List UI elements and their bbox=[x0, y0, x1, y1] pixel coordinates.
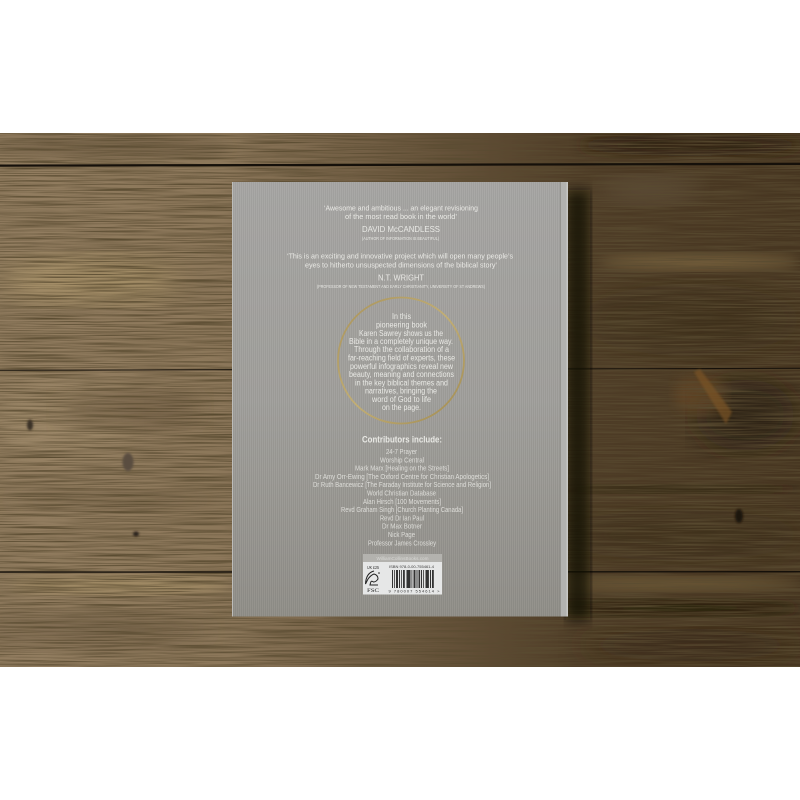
contributors list: Mark Marx [Healing on the Streets] bbox=[355, 466, 449, 473]
barcode bars bbox=[392, 570, 434, 588]
wood tonal patches bbox=[0, 134, 800, 661]
circle blurb text bbox=[348, 312, 455, 412]
quote block: N.T. Wright: eyes to hitherto unsuspected dimensions of the biblical story’ bbox=[305, 260, 497, 270]
gold circle bbox=[338, 298, 464, 424]
circle blurb text: far-reaching field of experts, these bbox=[348, 354, 455, 362]
circle blurb text: pioneering book bbox=[376, 320, 428, 330]
price: UK £25 bbox=[367, 565, 380, 570]
quote block: N.T. Wright: (PROFESSOR OF NEW TESTAMENT AND EARLY CHRISTIANITY, UNIVERSITY OF ST ANDREWS) bbox=[317, 284, 486, 289]
quote block: N.T. Wright bbox=[287, 252, 513, 289]
contributors list: Dr Amy Orr-Ewing [The Oxford Centre for Christian Apologetics] bbox=[315, 474, 489, 481]
circle blurb text: in the key biblical themes and bbox=[355, 378, 448, 387]
website band: WilliamCollinsBooks.com bbox=[376, 556, 429, 561]
book spine hinge bbox=[560, 182, 568, 616]
barcode panel bbox=[363, 562, 442, 594]
contributors list: 24-7 Prayer bbox=[386, 449, 418, 456]
contributors list: World Christian Database bbox=[367, 490, 436, 498]
quote block: N.T. Wright: N.T. WRIGHT bbox=[378, 272, 425, 282]
circle blurb text: on the page. bbox=[382, 403, 421, 412]
circle blurb text: narratives, bringing the bbox=[365, 386, 437, 396]
book shadow bbox=[566, 190, 590, 620]
circle blurb text: word of God to life bbox=[371, 395, 432, 404]
contributors list bbox=[313, 449, 491, 547]
circle blurb text: powerful infographics reveal new bbox=[350, 362, 453, 371]
contributors list: Worship Central bbox=[380, 457, 424, 464]
contributors list: Alan Hirsch [100 Movements] bbox=[363, 499, 441, 506]
book back cover bbox=[232, 182, 568, 616]
contributors list: Nick Page bbox=[388, 532, 415, 539]
isbn: ISBN 978-0-00-755461-4 bbox=[389, 565, 434, 569]
contributors list: Dr Ruth Bancewicz [The Faraday Institute for Science and Religion] bbox=[313, 482, 491, 489]
quote block: David McCandless: ‘Awesome and ambitious ... an elegant revisioning bbox=[324, 204, 478, 212]
circle blurb text: Karen Sawrey shows us the bbox=[359, 329, 443, 338]
wood grain bbox=[0, 133, 800, 667]
circle blurb text: Bible in a completely unique way. bbox=[349, 337, 453, 346]
icon: FSC tree bbox=[366, 571, 380, 585]
contributors list: Dr Max Botner bbox=[382, 524, 423, 531]
wood knots bbox=[27, 369, 743, 536]
wooden table bbox=[0, 133, 800, 667]
website band bbox=[363, 554, 442, 562]
circle blurb text: beauty, meaning and connections bbox=[349, 370, 454, 379]
circle blurb text: In this bbox=[392, 312, 411, 321]
quote block: David McCandless bbox=[324, 204, 478, 241]
photo scene bbox=[0, 133, 800, 667]
quote block: N.T. Wright: ‘This is an exciting and innovative project which will open many people’s bbox=[287, 252, 513, 260]
circle blurb text: Through the collaboration of a bbox=[354, 345, 449, 354]
contributors list: Professor James Crossley bbox=[368, 540, 436, 547]
barcode digits: 9 780007 554614 > bbox=[388, 588, 440, 594]
quote block: David McCandless: of the most read book in the world’ bbox=[345, 212, 457, 221]
contributors list: Revd Dr Ian Paul bbox=[380, 515, 424, 522]
contributors heading: Contributors include: bbox=[362, 434, 442, 444]
book left edge bbox=[232, 182, 233, 616]
plank gaps bbox=[0, 163, 800, 573]
FSC label: FSC bbox=[367, 588, 379, 594]
quote block: David McCandless: DAVID McCANDLESS bbox=[362, 224, 440, 234]
contributors list: Revd Graham Singh [Church Planting Canada] bbox=[341, 507, 463, 514]
quote block: David McCandless: (AUTHOR OF INFORMATION IS BEAUTIFUL) bbox=[362, 236, 440, 241]
